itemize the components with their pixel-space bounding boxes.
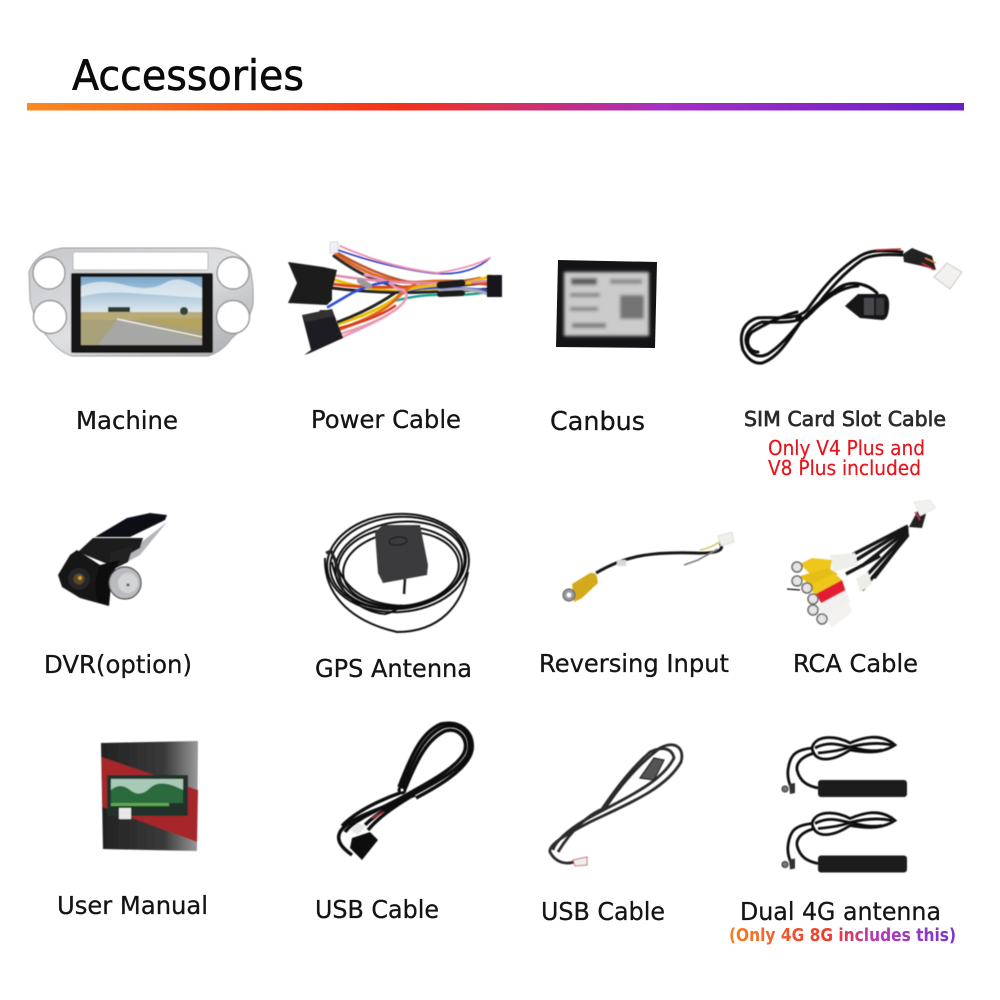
- label: canbus: Canbus: [550, 407, 645, 437]
- panel: reversing input: [563, 532, 734, 602]
- gradient title rule: [27, 103, 964, 110]
- panel: usb cable 2: [550, 745, 682, 866]
- label: reversing input: Reversing Input: [539, 649, 729, 678]
- icon: harness connectors: [288, 242, 502, 355]
- icon: head unit: [29, 248, 253, 356]
- icon: dash camera: [58, 513, 167, 606]
- label: power cable: Power Cable: [311, 405, 461, 434]
- panel: canbus: [556, 260, 657, 348]
- title: Accessories: [72, 51, 304, 100]
- panel: sim card slot cable: [741, 248, 962, 363]
- icon: antenna two: [782, 813, 907, 872]
- panel: gps antenna: [324, 509, 472, 632]
- note: v4 plus: Only V4 Plus and: [768, 436, 925, 460]
- icon: grey usb cable: [550, 745, 682, 866]
- icon: manual booklet: [101, 741, 198, 851]
- label: usb cable 1: USB Cable: [315, 895, 439, 924]
- icon: sim cable: [741, 248, 962, 363]
- panel: dual 4g antenna: [782, 737, 907, 872]
- panel: usb cable 1: [339, 723, 472, 860]
- icon: gps puck and cable: [324, 509, 472, 632]
- panel: dvr: [58, 513, 167, 606]
- icon: reversing cable: [563, 532, 734, 602]
- label: usb cable 2: USB Cable: [541, 897, 665, 926]
- panel: machine: [29, 248, 253, 356]
- label: rca cable: RCA Cable: [793, 649, 918, 678]
- panel: rca cable: [787, 500, 936, 628]
- note: only 4g 8g: (Only 4G 8G includes this): [729, 926, 956, 946]
- icon: rca bundle: [787, 500, 936, 628]
- icon: wiring harness: [328, 246, 491, 338]
- label: dual 4g antenna: Dual 4G antenna: [740, 897, 941, 926]
- icon: black usb cable: [339, 723, 472, 860]
- panel: user manual: [101, 741, 198, 851]
- icon: canbus box: [556, 260, 657, 348]
- label: dvr: DVR(option): [44, 650, 192, 679]
- panel: power cable: [288, 242, 502, 355]
- label: sim card slot cable: SIM Card Slot Cable: [744, 407, 946, 431]
- icon: antenna one: [782, 737, 907, 797]
- note: v8 plus: V8 Plus included: [768, 456, 921, 480]
- label: gps antenna: GPS Antenna: [315, 654, 472, 683]
- label: machine: Machine: [76, 406, 178, 435]
- label: user manual: User Manual: [57, 891, 208, 920]
